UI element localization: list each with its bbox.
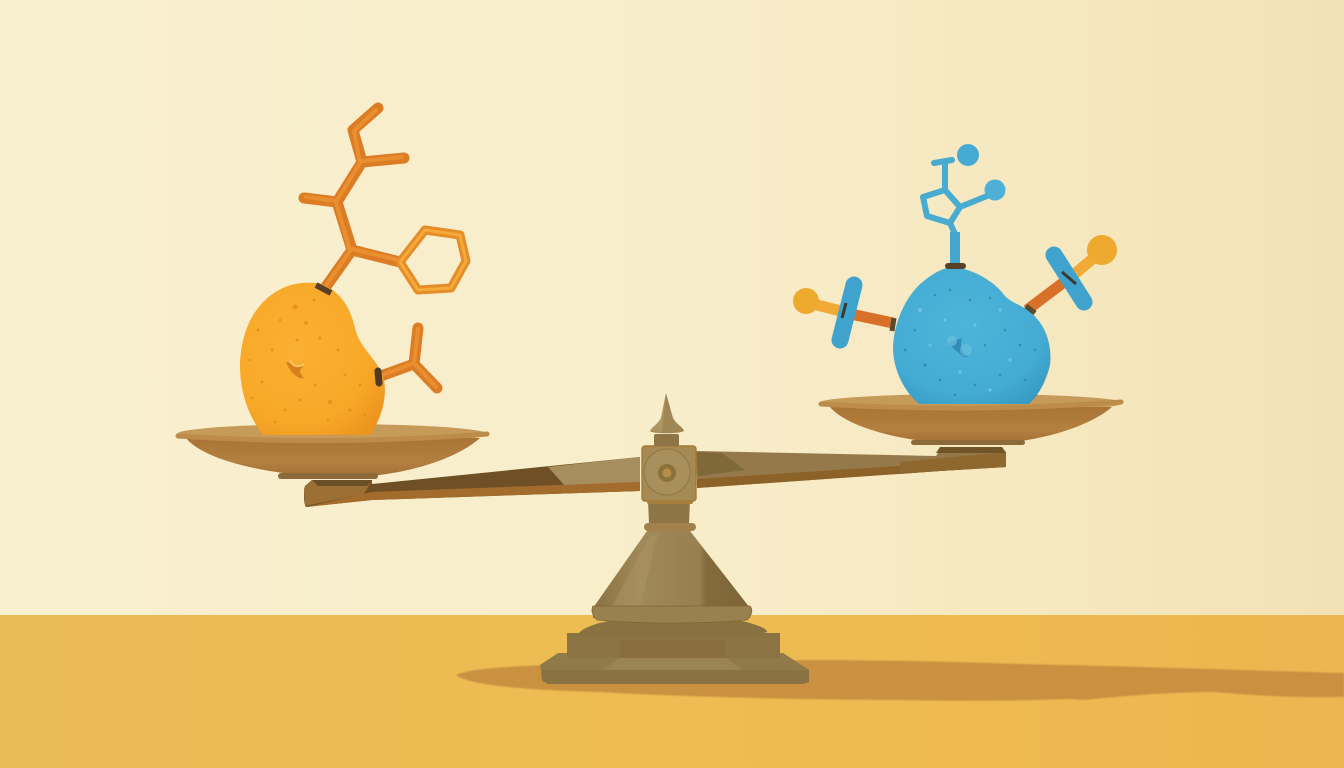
blue molecule top structure [923, 144, 1006, 265]
cast shadow of the scale [456, 660, 1344, 701]
blue molecule left arm [793, 285, 893, 340]
scale pivot block [642, 446, 696, 504]
blue molecule figure [793, 144, 1117, 404]
orange molecule side branch [378, 328, 437, 388]
scale beam [304, 447, 1006, 507]
orange fruit body [240, 283, 385, 435]
blue fruit body [892, 266, 1050, 404]
right pan [819, 394, 1123, 445]
left pan [177, 424, 487, 479]
scale finial [650, 393, 684, 446]
scale cone pillar [592, 500, 752, 623]
balance scale [304, 393, 1006, 684]
orange molecule top structure [304, 108, 466, 290]
scale base [540, 621, 809, 684]
orange molecule figure [240, 108, 466, 435]
blue molecule right arm [1027, 235, 1117, 310]
table surface [0, 615, 1344, 768]
